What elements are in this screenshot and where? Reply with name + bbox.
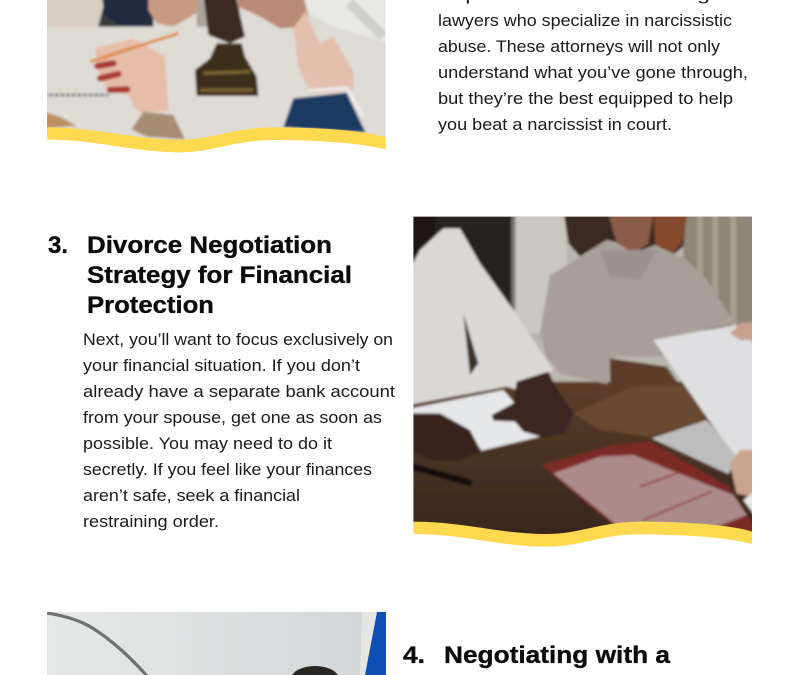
text block: section 3 body: aren’t safe, seek a financial bbox=[83, 486, 300, 505]
text block: section 3 body: Next, you’ll want to focus exclusively on bbox=[83, 330, 393, 349]
heading: section 4: Negotiating with a bbox=[444, 642, 670, 669]
heading: section 3: Protection bbox=[87, 292, 214, 319]
text block: section 3 body: your financial situation. If you don’t bbox=[83, 356, 360, 375]
photo: lawyers at table with statue bbox=[43, 0, 390, 152]
heading: section 3: 3. bbox=[48, 232, 68, 259]
text block: choosing a specialised lawyer bbox=[438, 0, 748, 134]
text block: choosing a specialised lawyer: abuse. These attorneys will not only bbox=[438, 37, 721, 56]
wave: yellow band under first photo bbox=[47, 127, 386, 152]
text block: section 3 body: possible. You may need to do it bbox=[83, 434, 332, 453]
text block: choosing a specialised lawyer: understand what you’ve gone through, bbox=[438, 63, 748, 82]
text block: choosing a specialised lawyer: but they’re the best equipped to help bbox=[438, 89, 733, 108]
heading: section 4: 4. bbox=[403, 642, 425, 669]
text block: section 3 body: restraining order. bbox=[83, 512, 219, 531]
heading: section 4 bbox=[403, 642, 670, 675]
photo: bright room with arched lamp and blue panel bbox=[47, 612, 386, 675]
wave: yellow band under second photo bbox=[413, 522, 752, 547]
heading: section 3 bbox=[48, 232, 352, 319]
text block: section 3 body: already have a separate bank account bbox=[83, 382, 395, 401]
text block: section 3 body bbox=[83, 330, 395, 531]
text block: section 3 body: from your spouse, get one as soon as bbox=[83, 408, 382, 427]
photo: people reviewing documents at table bbox=[407, 210, 759, 548]
heading: section 3: Divorce Negotiation bbox=[87, 232, 332, 259]
text block: choosing a specialised lawyer: you beat a narcissist in court. bbox=[438, 115, 672, 134]
text block: choosing a specialised lawyer: lawyers who specialize in narcissistic bbox=[438, 11, 733, 30]
text block: section 3 body: secretly. If you feel like your finances bbox=[83, 460, 372, 479]
heading: section 3: Strategy for Financial bbox=[87, 262, 352, 289]
